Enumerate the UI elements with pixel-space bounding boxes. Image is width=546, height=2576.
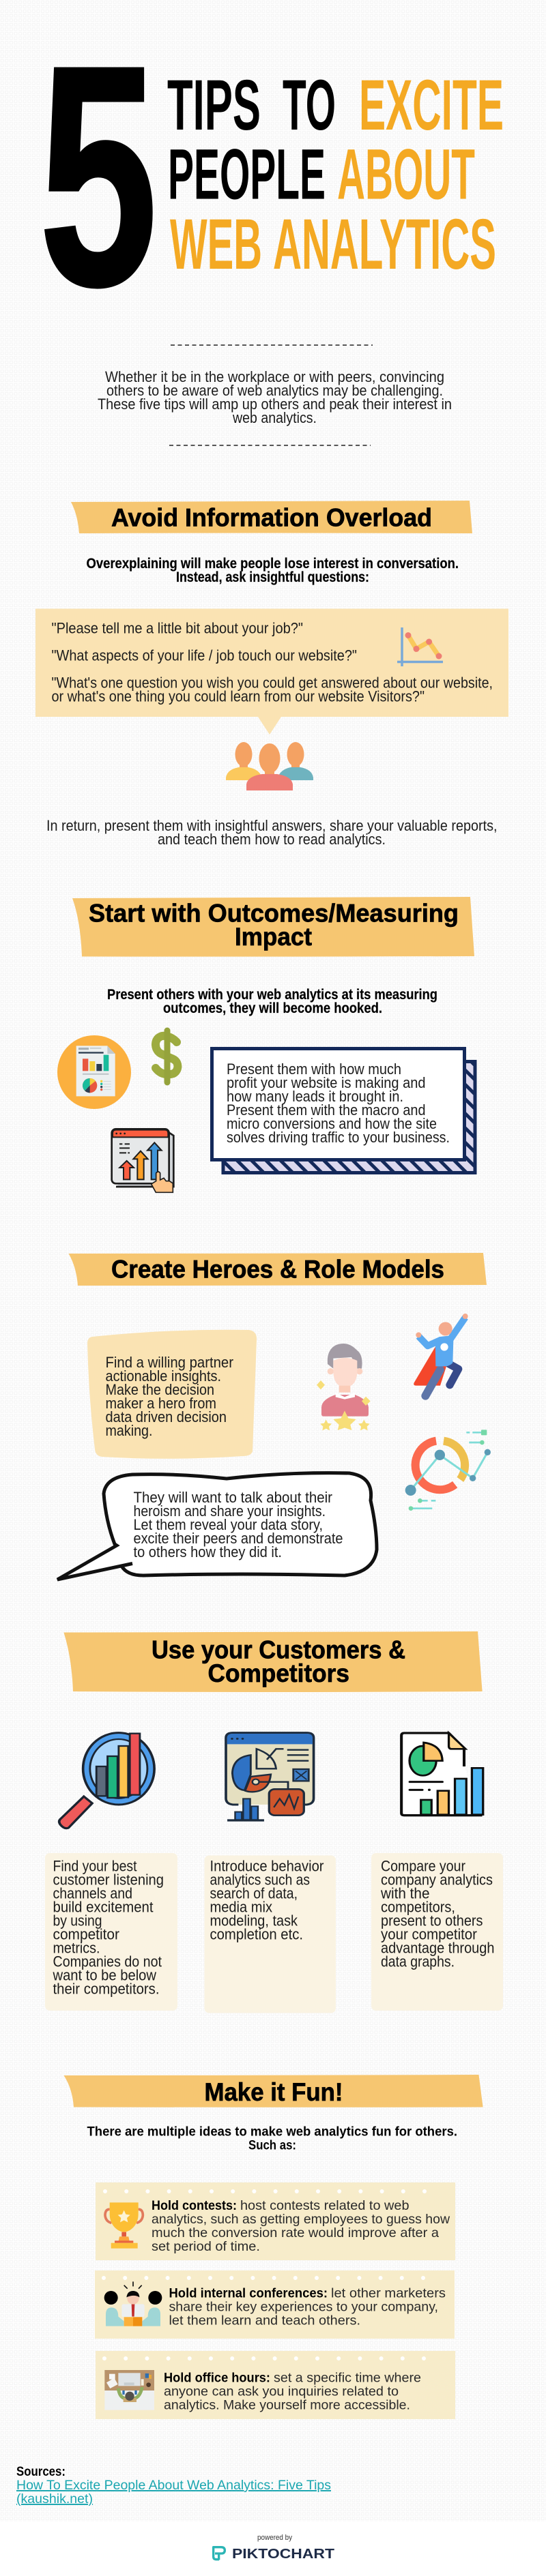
card: hold internal conferences: let them learn and teach others. [169,2313,360,2328]
card: hold contests: analytics, such as getting employees to guess how [152,2212,450,2227]
quote bubble [35,608,508,735]
sources [16,2464,331,2506]
speech bubble: excite their peers and demonstrate [134,1530,343,1547]
subheading 5 [87,2124,457,2152]
card: hold contests: set period of time. [152,2239,260,2254]
card: competitors: with the [380,1885,430,1901]
speech bubble [57,1473,377,1580]
quote bubble: or what's one thing you could learn from our website Visitors?" [52,687,425,705]
card: competitors [371,1853,503,2011]
title [39,1,504,351]
big number 5: 5 [39,1,158,351]
card: behavior analytics: modeling, task [210,1912,298,1929]
icon: document with charts [401,1733,483,1816]
callout box with stripes: micro conversions and how the site [227,1115,437,1132]
card: hold office hours: set a specific time where [274,2371,421,2386]
card: hold internal conferences [95,2270,455,2339]
quote bubble: "What's one question you wish you could get answered about our website, [52,674,493,692]
card: customers [45,1853,177,2011]
card: behavior analytics: search of data, [210,1885,298,1901]
callout box with stripes: Present them with how much [227,1061,401,1078]
card: customers: by using [53,1912,102,1929]
icon: piktochart logo [214,2547,225,2560]
card: competitors: Compare your [381,1858,465,1874]
intro text: others to be aware of web analytics may be challenging. [106,382,443,399]
card: hold office hours: Hold office hours: [164,2371,270,2386]
title line 1: TO [283,65,336,145]
icon: report circle [57,1035,131,1109]
footer: powered by piktochart: PIKTOCHART [232,2547,334,2562]
card: customers: customer listening [53,1871,164,1888]
icon: role model man [317,1344,371,1430]
card: customers: Find your best [53,1858,137,1874]
banner 2: Start with Outcomes/Measuring [89,899,459,928]
banner 4 [63,1631,483,1692]
title line 1: TIPS [167,65,261,145]
card: competitors: company analytics [381,1871,493,1888]
speech bubble: They will want to talk about their [134,1489,332,1506]
subheading 1: Overexplaining will make people lose interest in conversation. [86,555,459,572]
card: competitors: advantage through [381,1940,494,1956]
card: behavior analytics [205,1855,336,2013]
speech bubble: heroism and share your insights. [134,1502,326,1520]
banner 2 [72,897,474,957]
intro text: These five tips will amp up others and peak their interest in [98,396,452,413]
card: hold internal conferences: let other marketers [331,2286,446,2301]
card: customers: their competitors. [53,1981,160,1997]
card: customers: metrics. [53,1940,100,1956]
card: customers: channels and [53,1885,132,1901]
intro text [98,368,452,426]
callout box with stripes [212,1049,475,1173]
card: behavior analytics: completion etc. [210,1926,303,1942]
icon: people group [226,742,313,790]
callout box with stripes: Present them with the macro and [227,1101,426,1119]
card: competitors: competitors, [381,1899,455,1915]
card: hold office hours [96,2351,455,2419]
closing text 1: and teach them how to read analytics. [158,831,386,848]
title line 1 [167,65,504,145]
footer: powered by piktochart: powered by [257,2534,292,2542]
subheading 2: outcomes, they will become hooked. [163,1000,382,1016]
section 3: create heroes and role models [57,1253,491,1580]
closing text 1 [46,817,497,848]
footer: powered by piktochart [214,2534,334,2562]
banner 5 [63,2075,483,2107]
icon: trophy [105,2202,143,2249]
card: customers: build excitement [53,1899,154,1915]
banner 2: Impact [235,923,312,951]
title line 3 [170,205,496,284]
card: behavior analytics: media mix [210,1899,273,1915]
note card: actionable insights. [105,1367,221,1385]
banner 4: Competitors [207,1659,349,1687]
card: hold internal conferences: share their key experiences to your company, [169,2300,438,2315]
section 1: avoid information overload [35,501,508,848]
subheading 5: Such as: [248,2137,296,2152]
icon: superhero [414,1314,468,1396]
card: competitors: data graphs. [381,1953,455,1970]
card: behavior analytics: analytics such as [210,1871,310,1888]
quote bubble: "Please tell me a little bit about your job?" [52,619,303,637]
icon: analytics dashboard [226,1733,314,1820]
callout box with stripes: how many leads it brought in. [227,1088,403,1105]
icon: office desk [104,2370,154,2410]
banner 1: Avoid Information Overload [111,503,432,532]
title line 3: WEB [170,205,262,284]
icon: growth arrows window [112,1129,173,1192]
note card [87,1330,257,1459]
subheading 5: There are multiple ideas to make web analytics fun for others. [87,2124,457,2139]
card: customers: competitor [53,1926,119,1942]
callout box with stripes: profit your website is making and [227,1074,426,1091]
card: hold contests [96,2182,455,2260]
note card: maker a hero from [105,1395,216,1412]
sources: How To Excite People About Web Analytics: Five Tips [16,2478,331,2493]
speech bubble: to others how they did it. [134,1543,282,1560]
speech bubble: Let them reveal your data story, [134,1516,323,1533]
section 2: start with outcomes [57,897,475,1192]
sources: (kaushik.net) [16,2491,93,2506]
icon: magnifier with bars [59,1733,154,1829]
card: hold office hours: anyone can ask you inquiries related to [164,2384,399,2399]
icon: donut and line chart [405,1430,491,1511]
sources: Sources: [16,2464,66,2479]
intro text: Whether it be in the workplace or with peers, convincing [105,368,444,385]
banner 4: Use your Customers & [152,1635,405,1664]
title line 2: PEOPLE [168,135,326,214]
card: competitors: present to others [381,1912,483,1929]
card: customers: want to be below [53,1967,157,1983]
icon: dollar sign [156,1031,177,1082]
section 5: make it fun [63,2075,483,2419]
card: competitors: your competitor [381,1926,477,1942]
callout box with stripes: solves driving traffic to your business. [227,1129,450,1146]
subheading 1 [86,555,459,585]
card: hold contests: much the conversion rate would improve after a [152,2225,439,2240]
card: hold internal conferences: Hold internal conferences: [169,2286,328,2301]
banner 3: Create Heroes & Role Models [111,1255,444,1284]
quote bubble: "What aspects of your life / job touch our website?" [52,647,357,664]
closing text 1: In return, present them with insightful answers, share your valuable reports, [46,817,497,834]
section 4: customers and competitors [45,1631,503,2013]
subheading 1: Instead, ask insightful questions: [176,569,369,585]
note card: Find a willing partner [105,1354,233,1371]
note card: Make the decision [105,1381,214,1398]
icon: conference meeting [104,2281,162,2326]
note card: making. [105,1422,153,1439]
card: hold contests: Hold contests: [152,2198,237,2213]
subheading 2 [107,986,437,1016]
intro text: web analytics. [232,409,317,426]
card: behavior analytics: Introduce behavior [210,1858,324,1874]
card: customers: Companies do not [53,1953,162,1970]
subheading 2: Present others with your web analytics at its measuring [107,986,437,1003]
card: hold office hours: analytics. Make yourself more accessible. [164,2398,410,2413]
note card: data driven decision [105,1408,227,1425]
banner 5: Make it Fun! [205,2078,343,2106]
icon: line chart [397,627,443,666]
card: hold contests: host contests related to web [240,2198,410,2213]
